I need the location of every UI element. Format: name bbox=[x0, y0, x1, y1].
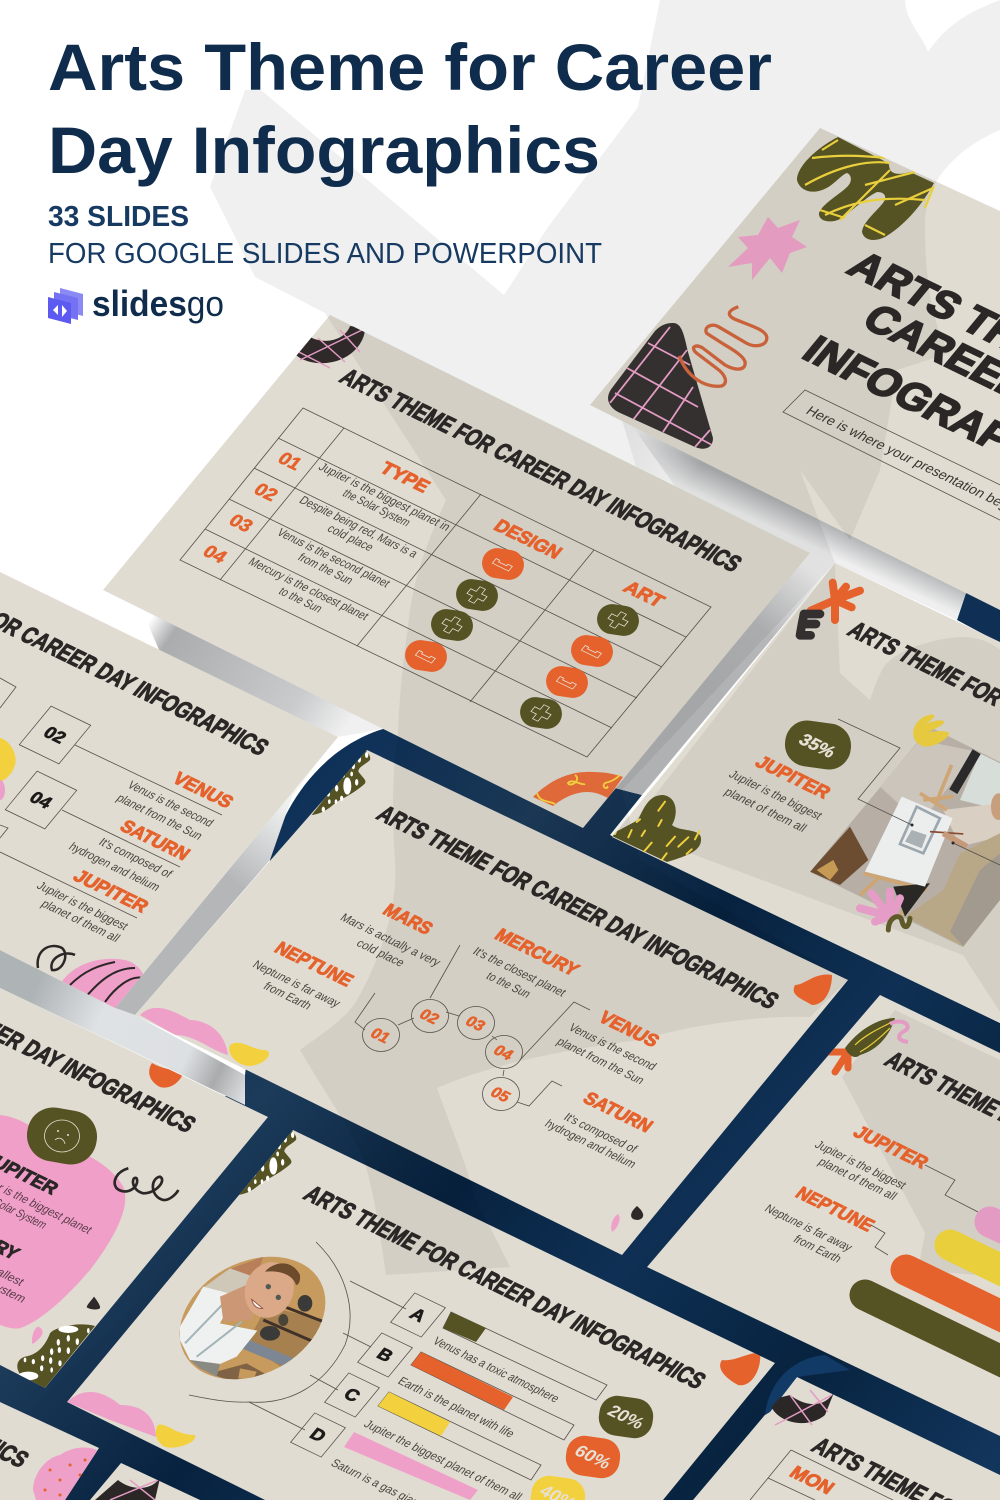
left slide pink blob small bbox=[0, 780, 5, 800]
left slide planet texts: planet of them all bbox=[38, 897, 123, 945]
table row descriptions: the Solar System bbox=[340, 487, 413, 529]
navy arc bottom right bbox=[765, 1355, 850, 1415]
table headers bbox=[375, 459, 669, 612]
progress percent badges: 60% bbox=[570, 1441, 616, 1473]
timeline connectors bbox=[355, 945, 590, 1106]
left slide planet texts: hydrogen and helium bbox=[66, 840, 163, 894]
shadow under left slide bbox=[0, 950, 245, 1105]
heading: title bbox=[48, 30, 772, 187]
table orange arch bbox=[533, 772, 623, 806]
stacked texts bbox=[762, 1123, 933, 1265]
black squiggle bbox=[115, 1168, 178, 1200]
stacked olive carrot bbox=[845, 1018, 895, 1057]
logo wordmark: slidesgo bbox=[92, 283, 224, 324]
timeline headings and text: It's composed of bbox=[561, 1111, 641, 1156]
stacked texts: planet of them all bbox=[815, 1155, 900, 1203]
progress pink blob bbox=[67, 1392, 156, 1437]
cover pink star bbox=[728, 217, 807, 280]
table check and cross icons bbox=[403, 546, 641, 731]
left slide black squiggle bbox=[38, 946, 75, 970]
progress letter boxes: B bbox=[373, 1344, 397, 1366]
slide: percent with painter bbox=[610, 583, 1000, 960]
left slide planet texts: Venus is the second bbox=[125, 778, 216, 829]
pink blob texts bbox=[0, 1149, 95, 1305]
table row descriptions: Despite being red, Mars is a bbox=[296, 494, 421, 560]
timeline orange blob bbox=[794, 975, 832, 1005]
timeline headings and text bbox=[250, 901, 663, 1171]
progress bar captions: Earth is the planet with life bbox=[395, 1375, 517, 1440]
stacked texts: Neptune is far away bbox=[762, 1202, 856, 1254]
left slide yellow blob bbox=[0, 738, 16, 782]
progress arc bbox=[189, 1242, 350, 1402]
schedule table lines bbox=[750, 1450, 893, 1500]
timeline headings and text: SATURN bbox=[578, 1089, 657, 1137]
left slide number boxes bbox=[0, 678, 91, 838]
table row numbers: 02 bbox=[249, 480, 282, 505]
timeline numbered circles: 03 bbox=[462, 1014, 489, 1035]
painter body text: Jupiter is the biggest bbox=[726, 768, 825, 822]
left slide planet texts: planet from the Sun bbox=[114, 791, 205, 842]
stacked texts: from Earth bbox=[791, 1233, 845, 1265]
bottom left pink dotted blob bbox=[33, 1448, 97, 1500]
progress olive dotted shape bbox=[238, 1129, 296, 1195]
timeline numbered circles: 01 bbox=[367, 1026, 394, 1047]
timeline headings and text: to the Sun bbox=[483, 969, 534, 1000]
timeline title: ARTS THEME FOR CAREER DAY INFOGRAPHICS bbox=[371, 801, 784, 1014]
timeline black drop bbox=[631, 1206, 643, 1220]
table row descriptions bbox=[246, 460, 453, 623]
painter pink coral bbox=[860, 892, 900, 922]
painter percent badge: 35% bbox=[795, 730, 840, 761]
shadow under title slide bbox=[632, 426, 966, 620]
stacked connectors bbox=[871, 1165, 978, 1255]
subtitle: FOR GOOGLE SLIDES AND POWERPOINT bbox=[48, 238, 602, 270]
left slide planet texts: VENUS bbox=[168, 769, 237, 812]
schedule black blob bbox=[770, 1390, 835, 1425]
large brush overlay bbox=[210, 0, 1000, 1277]
left slide planet texts: SATURN bbox=[115, 817, 194, 865]
painter percent badge bbox=[784, 720, 852, 770]
cover black triangle bbox=[608, 323, 713, 449]
table row numbers: 04 bbox=[198, 542, 231, 568]
stacked texts: JUPITER bbox=[849, 1123, 933, 1173]
slide: table bbox=[180, 326, 747, 806]
left slide planet texts: JUPITER bbox=[69, 867, 153, 917]
timeline headings and text: MERCURY bbox=[490, 925, 583, 980]
subtitle: 33 SLIDES bbox=[48, 201, 189, 233]
table headers: ART bbox=[619, 578, 669, 612]
left slide pink striped blob bbox=[60, 959, 145, 1010]
timeline headings and text: It's the closest planet bbox=[470, 945, 569, 999]
slide: bottom left bbox=[0, 1260, 97, 1500]
heading: title: Day Infographics bbox=[48, 113, 600, 187]
timeline pink blob bbox=[140, 1008, 228, 1055]
slide: bottom small bbox=[95, 1478, 160, 1500]
table grid bbox=[180, 408, 711, 757]
left slide planet texts bbox=[34, 769, 237, 945]
timeline numbered circles bbox=[362, 1000, 522, 1110]
left slide number boxes: 02 bbox=[40, 723, 70, 747]
timeline headings and text: NEPTUNE bbox=[270, 939, 357, 991]
table row descriptions: from the Sun bbox=[295, 551, 356, 587]
timeline pink drop bbox=[611, 1214, 620, 1232]
progress yellow blob bbox=[156, 1425, 195, 1448]
progress title: ARTS THEME FOR CAREER DAY INFOGRAPHICS bbox=[298, 1181, 711, 1394]
subtitle bbox=[48, 201, 602, 270]
timeline olive dotted shape bbox=[312, 749, 370, 815]
progress percent badges bbox=[528, 1393, 656, 1500]
progress bar captions: Venus has a toxic atmosphere bbox=[430, 1335, 562, 1405]
navy backdrop bbox=[0, 727, 1000, 1500]
shadow fade start bbox=[622, 420, 705, 512]
table row descriptions: cold place bbox=[324, 522, 377, 554]
shadow between table slide and right slide bbox=[615, 553, 835, 795]
cover olive scribble bbox=[797, 137, 934, 240]
timeline numbered circles: 02 bbox=[416, 1007, 443, 1028]
stacked orange coral bbox=[828, 1052, 852, 1072]
black drop bbox=[87, 1297, 100, 1310]
navy corner top right bbox=[957, 593, 1000, 643]
timeline headings and text: VENUS bbox=[594, 1008, 663, 1051]
stacked texts: Jupiter is the biggest bbox=[812, 1138, 909, 1192]
cover orange squiggle bbox=[679, 307, 767, 386]
table headers: DESIGN bbox=[489, 516, 566, 563]
table row numbers bbox=[204, 452, 301, 564]
timeline numbered circles: 05 bbox=[487, 1085, 514, 1106]
timeline numbered circles: 04 bbox=[490, 1043, 517, 1064]
pink big blob bbox=[0, 1115, 125, 1329]
slide: cover bbox=[608, 137, 1000, 540]
shadow between table slide and left slide bbox=[140, 606, 389, 737]
orange blob bbox=[149, 1063, 185, 1088]
progress connectors bbox=[249, 1281, 406, 1430]
timeline headings and text: Mars is actually a very bbox=[337, 911, 444, 969]
progress bar captions bbox=[328, 1335, 562, 1500]
table black blob bbox=[292, 326, 365, 368]
painter olive squiggle bbox=[888, 917, 910, 930]
stacked texts: NEPTUNE bbox=[791, 1184, 878, 1236]
table title: ARTS THEME FOR CAREER DAY INFOGRAPHICS bbox=[334, 364, 747, 577]
left slide number boxes: 04 bbox=[26, 788, 56, 812]
schedule heading: MON bbox=[785, 1463, 838, 1498]
timeline headings and text: MARS bbox=[378, 901, 437, 939]
painter connector box bbox=[838, 719, 1000, 865]
progress letter boxes bbox=[291, 1293, 445, 1457]
bottom small black blob bbox=[95, 1478, 160, 1500]
progress letter boxes: D bbox=[306, 1424, 330, 1446]
table headers: TYPE bbox=[375, 459, 434, 497]
table row descriptions: to the Sun bbox=[276, 585, 325, 615]
heading: title: Arts Theme for Career bbox=[48, 30, 772, 104]
photo: painter at easel bbox=[810, 729, 1000, 947]
stacked pink squiggle bbox=[890, 1022, 908, 1042]
painter yellow fork bbox=[913, 715, 949, 747]
painter orange flower bbox=[811, 583, 860, 620]
timeline headings and text: hydrogen and helium bbox=[542, 1117, 639, 1171]
timeline headings and text: from Earth bbox=[261, 980, 315, 1012]
olive dotted blob bbox=[17, 1324, 95, 1390]
progress bars bbox=[344, 1312, 607, 1500]
left slide planet texts: Jupiter is the biggest bbox=[34, 879, 131, 933]
slide: schedule bottom right bbox=[750, 1390, 1000, 1500]
progress percent badges: 20% bbox=[603, 1401, 649, 1433]
painter heading: JUPITER bbox=[751, 753, 835, 803]
table row descriptions: Venus is the second planet bbox=[274, 526, 393, 590]
timeline headings and text: cold place bbox=[354, 937, 408, 969]
olive sad face badge bbox=[23, 1103, 101, 1169]
timeline headings and text: Venus is the second bbox=[566, 1021, 659, 1073]
pink drop bbox=[32, 1327, 43, 1344]
stacked rounded bars bbox=[865, 1222, 1000, 1370]
icon: slidesgo logo bbox=[48, 288, 83, 324]
table row descriptions: Jupiter is the biggest planet in bbox=[316, 460, 453, 534]
slide: planets left bbox=[0, 613, 269, 1008]
painter black squiggle bbox=[800, 614, 820, 635]
timeline headings and text: Neptune is far away bbox=[250, 958, 344, 1010]
slide: pink blob left bbox=[0, 925, 201, 1390]
progress orange blob bbox=[720, 1353, 760, 1385]
shadow beside left slide bbox=[115, 733, 362, 1015]
timeline headings and text: planet from the Sun bbox=[554, 1035, 647, 1087]
slide: stacked bars right bbox=[762, 1018, 1000, 1370]
painter body text: planet of them all bbox=[721, 785, 810, 834]
progress letter boxes: A bbox=[406, 1304, 430, 1326]
table row numbers: 01 bbox=[273, 449, 306, 475]
left slide planet texts: It's composed of bbox=[96, 836, 176, 881]
slide: progress bars with portrait bbox=[67, 1129, 760, 1500]
slide: timeline center bbox=[140, 749, 832, 1232]
photo: smiling man portrait bbox=[170, 1250, 337, 1387]
table row descriptions: Mercury is the closest planet bbox=[246, 555, 372, 623]
table row numbers: 03 bbox=[224, 511, 257, 536]
painter olive plant bbox=[610, 795, 701, 862]
timeline yellow blob bbox=[229, 1043, 269, 1066]
left slide connector lines bbox=[0, 745, 222, 918]
progress letter boxes: C bbox=[340, 1384, 364, 1406]
